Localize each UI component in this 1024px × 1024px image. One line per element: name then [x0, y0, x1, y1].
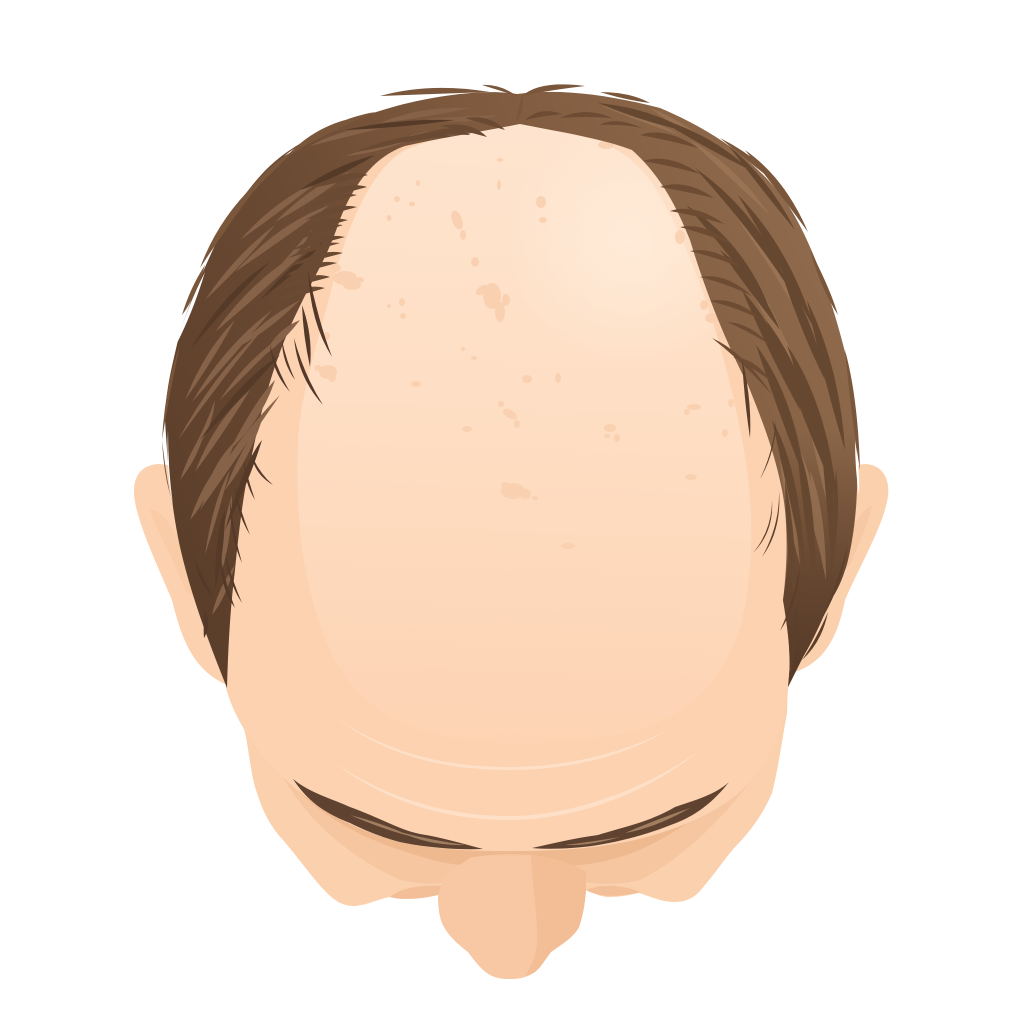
top parting and flyaway hairs [162, 84, 860, 500]
left light strands [178, 108, 500, 615]
left ear [134, 464, 240, 684]
right hairline strands [525, 111, 772, 395]
left hairline strands [272, 117, 505, 302]
lighter central scalp area [297, 120, 751, 743]
left eyebrow [293, 779, 483, 849]
darker lower right lock [782, 420, 857, 687]
right light strands [600, 105, 832, 580]
scalp and forehead [224, 110, 800, 851]
shadow band under brow [275, 762, 751, 866]
right long thin dark strands [742, 358, 848, 687]
nose [438, 856, 586, 979]
right dark strands [598, 103, 845, 610]
scalp freckles [314, 141, 734, 549]
cheek shadow plane [275, 759, 765, 884]
lower lobe shadows [390, 885, 640, 899]
right ear [780, 464, 888, 672]
edge slivers separating flyaway hairs [168, 125, 859, 505]
hair mass [165, 92, 857, 688]
left darker strands [190, 120, 455, 590]
right eyebrow [532, 782, 729, 849]
face below the forehead [227, 600, 788, 979]
left long thin dark strands [195, 270, 332, 638]
forehead wrinkles [335, 717, 701, 820]
